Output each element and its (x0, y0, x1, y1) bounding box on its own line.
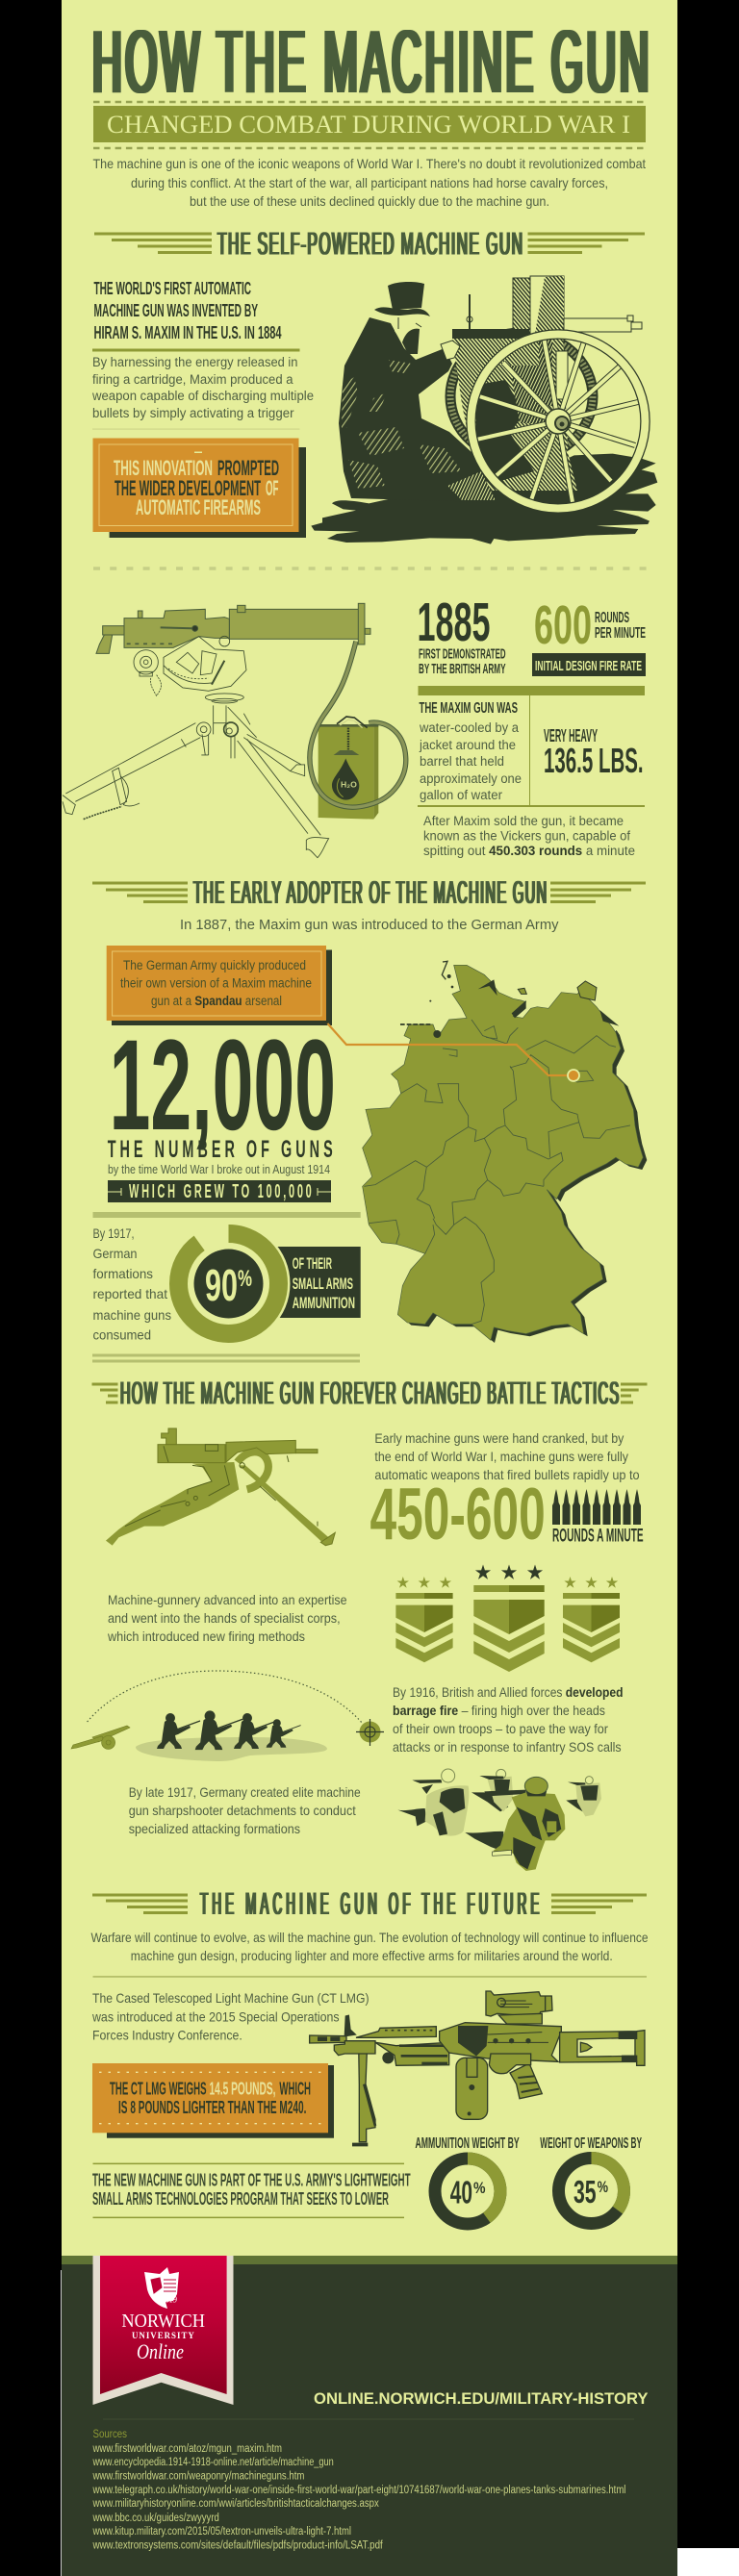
sources list: www.telegraph.co.uk/history/world-war-one/inside-first-world-war/part-eight/10741687/world-war-one-planes-tanks-submarines.html (92, 2485, 625, 2496)
soldier right (566, 1777, 601, 1816)
callout: CT LMG weighs (92, 2063, 334, 2138)
text block: harnessing the energy: By harnessing the energy released in (92, 355, 298, 369)
text block: barrage fire: barrage fire – firing high over the heads (393, 1703, 605, 1718)
text block: warfare will continue (90, 1930, 649, 1963)
sources list: www.textronsystems.com/sites/default/files/pdfs/product-info/LSAT.pdf (92, 2539, 383, 2551)
text block: lightweight small arms program: SMALL ARMS TECHNOLOGIES PROGRAM THAT SEEKS TO LOWER (92, 2189, 389, 2209)
callout: german army spandau: their own version of a Maxim machine (120, 975, 312, 991)
text block: vickers gun: After Maxim sold the gun, it became (423, 814, 624, 828)
gun body (96, 603, 370, 653)
callout: german army spandau (107, 946, 332, 1025)
stat: 12,000 guns: WHICH GREW TO 100,000 (129, 1181, 314, 1202)
text block: by 1917: consumed (92, 1327, 151, 1343)
text block: vickers gun (423, 814, 635, 858)
stat: 450-600 rounds a minute: 450-600 (370, 1474, 546, 1555)
callout: this innovation: OF (266, 476, 279, 500)
text block: sharpshooter detachments: By late 1917, Germany created elite machine (129, 1784, 361, 1800)
text block: by 1917: reported that (92, 1286, 167, 1301)
heading: the early adopter (92, 875, 646, 911)
text block: sharpshooter detachments: specialized attacking formations (129, 1821, 300, 1836)
icon: center rank insignia (473, 1564, 545, 1672)
text block: barrage fire (393, 1684, 624, 1755)
text block: warfare will continue: Warfare will continue to evolve, as will the machine gun. The evolution of technology will continue to influence (90, 1930, 649, 1945)
gun mechanism (452, 276, 642, 491)
stat: 450-600 rounds a minute: ROUNDS A MINUTE (552, 1526, 644, 1547)
text block: warfare will continue: machine gun design, producing lighter and more effective arms for militaries around the world. (131, 1948, 613, 1963)
text block: water-cooled: approximately one (420, 771, 522, 786)
donut: 90%: % (238, 1266, 252, 1292)
hose (310, 642, 406, 807)
logo: Norwich University banner: Online (137, 2339, 184, 2363)
intro text: The machine gun is one of the iconic weapons of World War I. There's no doubt it revolutionized combat (92, 156, 646, 171)
text block: early machine guns: the end of World War I, machine guns were fully (374, 1449, 628, 1464)
text block: lightweight small arms program (92, 2163, 411, 2218)
text block: first automatic machine gun (94, 279, 281, 342)
callout: CT LMG weighs: IS 8 POUNDS LIGHTER THAN THE M240. (118, 2098, 306, 2117)
text block: CT LMG: was introduced at the 2015 Special Operations (91, 2008, 340, 2024)
stat: very heavy 136.5 lbs: VERY HEAVY (544, 726, 598, 745)
text block: barrage fire: attacks or in response to infantry SOS calls (393, 1739, 622, 1755)
subtitle banner: CHANGED COMBAT DURING WORLD WAR I (107, 111, 630, 139)
water can (319, 717, 378, 820)
connector line to Spandau (327, 1023, 579, 1081)
rear wheel (450, 333, 593, 460)
text block: barrage fire: By 1916, British and Allied forces developed (393, 1684, 624, 1700)
callout: this innovation (92, 439, 306, 538)
text block: machine-gunnery (107, 1592, 347, 1644)
illustration: kneeling sharpshooters (397, 1769, 601, 1871)
text block: by 1917: By 1917, (92, 1225, 135, 1241)
donut: weight of weapons 35%: WEIGHT OF WEAPONS BY (540, 2135, 642, 2152)
text block: CT LMG (91, 1990, 369, 2043)
stat: 1885 first demonstrated (418, 592, 506, 677)
sources list: www.encyclopedia.1914-1918-online.net/article/machine_gun (92, 2457, 334, 2468)
donut: weight of weapons 35%: % (598, 2178, 608, 2196)
text block: CT LMG: The Cased Telescoped Light Machine Gun (CT LMG) (92, 1990, 370, 2006)
text block: first automatic machine gun: MACHINE GUN WAS INVENTED BY (94, 301, 258, 320)
ground shadow (136, 1737, 327, 1761)
icon: advancing soldiers (157, 1710, 301, 1750)
illustration: CT LMG rifle (310, 1991, 645, 2146)
stat box: of their small arms ammunition: OF THEIR (293, 1254, 332, 1273)
intro text: but the use of these units declined quickly due to the machine gun. (190, 193, 549, 209)
icon: bullets (552, 1489, 641, 1525)
front wheel (471, 335, 645, 508)
illustration: Hiram Maxim at the gun (311, 276, 657, 544)
panel: footer (61, 2256, 677, 2576)
text block: machine-gunnery: which introduced new firing methods (107, 1629, 305, 1644)
stat box: of their small arms ammunition: AMMUNITION (293, 1294, 355, 1312)
panel: main body (62, 0, 677, 2256)
sources list: Sources (92, 2429, 127, 2440)
text block: sharpshooter detachments: gun sharpshooter detachments to conduct (129, 1803, 356, 1818)
sources list: www.bbc.co.uk/guides/zwyyyrd (92, 2513, 219, 2524)
sources list: www.firstworldwar.com/weaponry/machineguns.htm (92, 2470, 304, 2482)
link text: ONLINE.NORWICH.EDU/MILITARY-HISTORY (314, 2389, 649, 2408)
icon: crest: 1819 (161, 2295, 177, 2305)
donut: 90%: 90 (205, 1260, 238, 1310)
map: Germany (363, 961, 647, 1343)
illustration: tripod machine gun (106, 1428, 335, 1546)
logo: Norwich University banner: UNIVERSITY (132, 2331, 195, 2340)
water can: H₂O (341, 780, 357, 790)
callout: this innovation: AUTOMATIC FIREARMS (136, 495, 261, 519)
stat: 12,000 guns: by the time World War I broke out in August 1914 (108, 1163, 330, 1176)
stat: 1885 first demonstrated: BY THE BRITISH ARMY (419, 662, 506, 677)
sources list: www.firstworldwar.com/atoz/mgun_maxim.htm (92, 2443, 282, 2455)
text block: water-cooled: THE MAXIM GUN WAS (420, 700, 518, 717)
text block: by 1917: German (92, 1246, 137, 1261)
callout: CT LMG weighs: WHICH (279, 2080, 311, 2099)
ink puddle (311, 454, 657, 544)
text block: harnessing the energy: bullets by simply activating a trigger (92, 406, 294, 420)
text block: early machine guns: automatic weapons that fired bullets rapidly up to (374, 1467, 640, 1482)
stat: very heavy 136.5 lbs: 136.5 LBS. (544, 741, 644, 780)
text block: water-cooled (419, 700, 522, 802)
callout: this innovation: PROMPTED (217, 456, 279, 480)
seated man in top hat (339, 282, 496, 502)
icon: howitzer (71, 1726, 130, 1749)
stat: 600 rounds per minute: ROUNDS (595, 610, 629, 626)
callout: CT LMG weighs: 14.5 POUNDS, (210, 2080, 275, 2099)
icon: crest (144, 2267, 179, 2309)
donut: weight of weapons 35%: 35 (573, 2174, 597, 2210)
text block: lightweight small arms program: THE NEW MACHINE GUN IS PART OF THE U.S. ARMY'S LIGHTWEIGHT (92, 2171, 411, 2190)
text block: harnessing the energy: weapon capable of discharging multiple (91, 389, 314, 403)
donut: 90% (167, 1222, 291, 1345)
sources list (92, 2429, 625, 2551)
stat: 600 rounds per minute (532, 594, 646, 676)
callout: this innovation: THE WIDER DEVELOPMENT (115, 476, 261, 500)
icon: right rank insignia (563, 1577, 620, 1662)
text block: CT LMG: Forces Industry Conference. (92, 2028, 242, 2043)
stat: 600 rounds per minute: PER MINUTE (595, 625, 646, 642)
heading: the self-powered machine gun (94, 227, 645, 262)
soldier front (465, 1777, 565, 1871)
intro text: during this conflict. At the start of the war, all participant nations had horse cavalry forces, (131, 175, 608, 190)
soldier center back (471, 1769, 526, 1811)
stat: 12,000 guns: 12,000 (110, 1014, 336, 1157)
logo: Norwich University banner: NORWICH (121, 2311, 205, 2332)
donut: ammunition weight 40%: % (473, 2179, 485, 2197)
text block: machine-gunnery: and went into the hands of specialist corps, (108, 1610, 341, 1626)
illustration: barrage fire scene (71, 1671, 384, 1761)
stat: very heavy 136.5 lbs (544, 726, 644, 780)
intro text (92, 156, 646, 209)
text block: early machine guns (374, 1430, 640, 1482)
stat box: of their small arms ammunition (275, 1247, 361, 1318)
callout: german army spandau: The German Army quickly produced (123, 958, 306, 972)
stat: 600 rounds per minute: INITIAL DESIGN FIRE RATE (535, 658, 642, 674)
donut: weight of weapons 35% (540, 2135, 642, 2224)
text block: by 1917 (92, 1225, 171, 1343)
heading: the machine gun of the future (92, 1886, 647, 1921)
text block: first automatic machine gun: THE WORLD'S FIRST AUTOMATIC (94, 279, 251, 298)
icon: left rank insignia (395, 1577, 453, 1662)
soldier left (397, 1769, 469, 1836)
text block: first automatic machine gun: HIRAM S. MAXIM IN THE U.S. IN 1884 (94, 323, 281, 342)
text block: early machine guns: Early machine guns were hand cranked, but by (374, 1430, 624, 1446)
logo: Norwich University banner (92, 2256, 233, 2405)
sources list: www.militaryhistoryonline.com/wwi/articles/britishtacticalchanges.aspx (92, 2498, 379, 2510)
callout: german army spandau: gun at a Spandau arsenal (151, 994, 282, 1008)
text block: barrage fire: of their own troops – to pave the way for (393, 1721, 608, 1736)
donut: ammunition weight 40%: 40 (450, 2175, 472, 2210)
stat: 1885 first demonstrated: FIRST DEMONSTRATED (419, 646, 506, 662)
text: in 1887: In 1887, the Maxim gun was introduced to the German Army (180, 917, 559, 933)
text block: harnessing the energy: firing a cartridge, Maxim produced a (92, 372, 293, 387)
stat: 12,000 guns: THE NUMBER OF GUNS (108, 1136, 337, 1163)
callout: CT LMG weighs: THE CT LMG WEIGHS (110, 2080, 206, 2099)
stat: 600 rounds per minute: 600 (534, 594, 592, 656)
text block: water-cooled: jacket around the (419, 738, 516, 752)
text block: by 1917: formations (92, 1266, 153, 1281)
text block: vickers gun: known as the Vickers gun, capable of (423, 829, 630, 843)
text block: water-cooled: gallon of water (420, 788, 502, 802)
illustration: Maxim gun on tripod with water can (63, 603, 406, 858)
text block: vickers gun: spitting out 450.303 rounds a minute (423, 844, 635, 858)
donut: ammunition weight 40%: AMMUNITION WEIGHT BY (416, 2135, 520, 2152)
mount and tripod (63, 636, 329, 858)
stat: 12,000 guns (108, 1014, 337, 1202)
text block: water-cooled: water-cooled by a (419, 720, 519, 735)
white corner (677, 2548, 739, 2576)
text block: machine-gunnery: Machine-gunnery advanced into an expertise (108, 1592, 347, 1607)
icon: target crosshair (356, 1719, 384, 1746)
text block: by 1917: machine guns (92, 1307, 171, 1323)
sources list: www.kitup.military.com/2015/05/textron-unveils-ultra-light-7.html (92, 2526, 351, 2538)
text block: harnessing the energy (91, 355, 314, 420)
text block: water-cooled: barrel that held (420, 754, 504, 769)
water drop icon (332, 758, 359, 800)
callout: this innovation: THIS INNOVATION (114, 456, 213, 480)
donut: ammunition weight 40% (416, 2135, 520, 2224)
stat box: of their small arms ammunition: SMALL ARMS (293, 1275, 353, 1293)
stat: 1885 first demonstrated: 1885 (418, 592, 491, 653)
text block: sharpshooter detachments (129, 1784, 361, 1836)
